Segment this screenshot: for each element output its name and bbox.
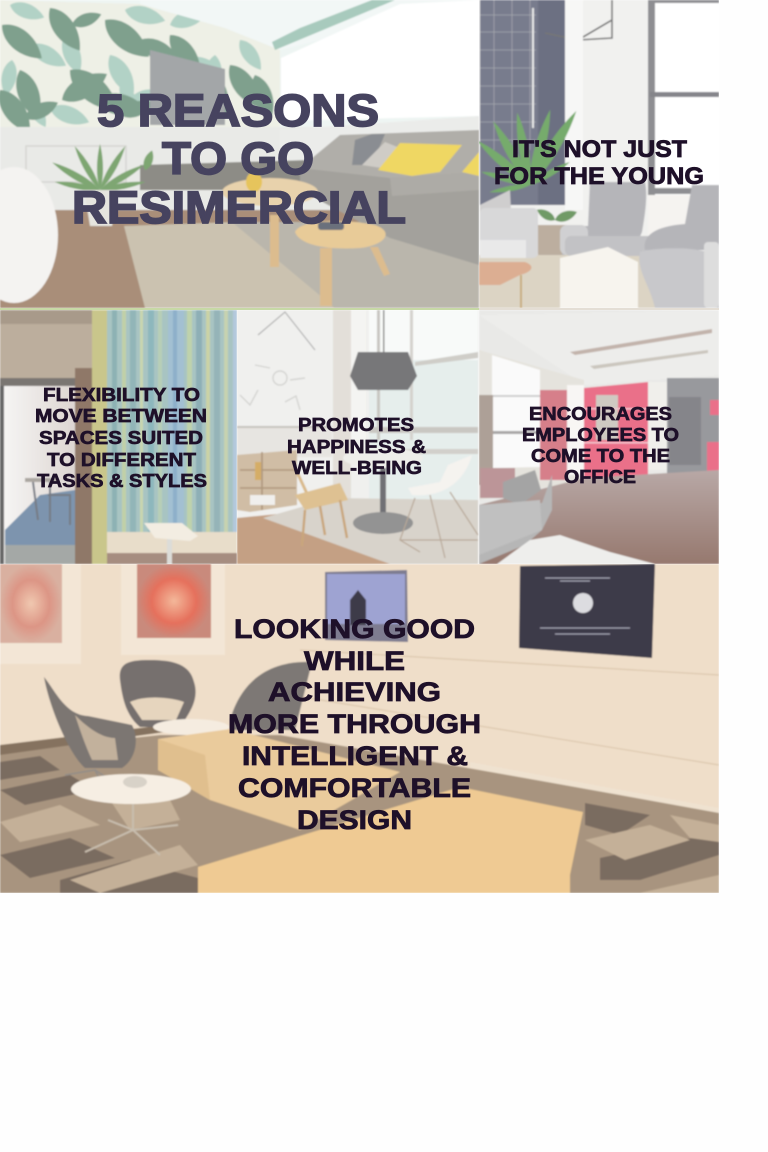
text: encourages: EMPLOYEES TO — [522, 424, 679, 445]
text: looking good: MORE THROUGH — [228, 709, 481, 739]
title text: TO GO — [162, 133, 314, 184]
text: happiness — [287, 414, 426, 478]
title text — [72, 85, 406, 233]
divider under top row — [0, 308, 479, 310]
text: happiness: WELL-BEING — [292, 457, 422, 478]
photo: lounge with armchairs — [474, 0, 719, 308]
text: encourages: COME TO THE — [531, 445, 670, 466]
text: looking good: WHILE — [304, 646, 405, 676]
text: flexibility: TASKS & STYLES — [37, 470, 207, 491]
title text: RESIMERCIAL — [72, 182, 406, 233]
text: flexibility — [35, 384, 207, 491]
text: it's not just for the young: FOR THE YOUNG — [494, 163, 704, 190]
text: looking good: ACHIEVING — [268, 677, 441, 707]
panel: title — [0, 0, 479, 308]
text: encourages: OFFICE — [564, 466, 636, 487]
text: looking good — [228, 614, 481, 835]
text: happiness: PROMOTES — [298, 414, 414, 435]
text: looking good: LOOKING GOOD — [234, 614, 475, 644]
text: looking good: INTELLIGENT & — [242, 741, 468, 771]
photo: doorway and striped curtain — [0, 310, 237, 564]
text: it's not just for the young — [494, 136, 704, 190]
text: flexibility: SPACES SUITED — [39, 427, 203, 448]
text: flexibility: FLEXIBILITY TO — [43, 384, 200, 405]
text: flexibility: MOVE BETWEEN — [35, 405, 207, 426]
text: looking good: COMFORTABLE — [238, 773, 471, 803]
text: encourages: ENCOURAGES — [529, 403, 672, 424]
photo: lobby with ottomans — [0, 564, 719, 893]
text: looking good: DESIGN — [297, 805, 412, 835]
panel: happiness — [237, 310, 479, 564]
photo: living room with leaf wallpaper — [0, 0, 479, 308]
panel: flexibility — [0, 310, 237, 564]
panel: it's not just for the young — [474, 0, 719, 308]
text: encourages — [522, 403, 679, 487]
text: it's not just for the young: IT'S NOT JUST — [512, 136, 687, 163]
title text: 5 REASONS — [97, 85, 379, 136]
photo: pink accent office — [479, 310, 719, 564]
panel: looking good — [0, 564, 719, 893]
panel: encourages — [479, 310, 719, 564]
text: happiness: HAPPINESS & — [287, 436, 426, 457]
photo: dining corner with pendant lamp — [237, 310, 479, 564]
text: flexibility: TO DIFFERENT — [47, 449, 197, 470]
